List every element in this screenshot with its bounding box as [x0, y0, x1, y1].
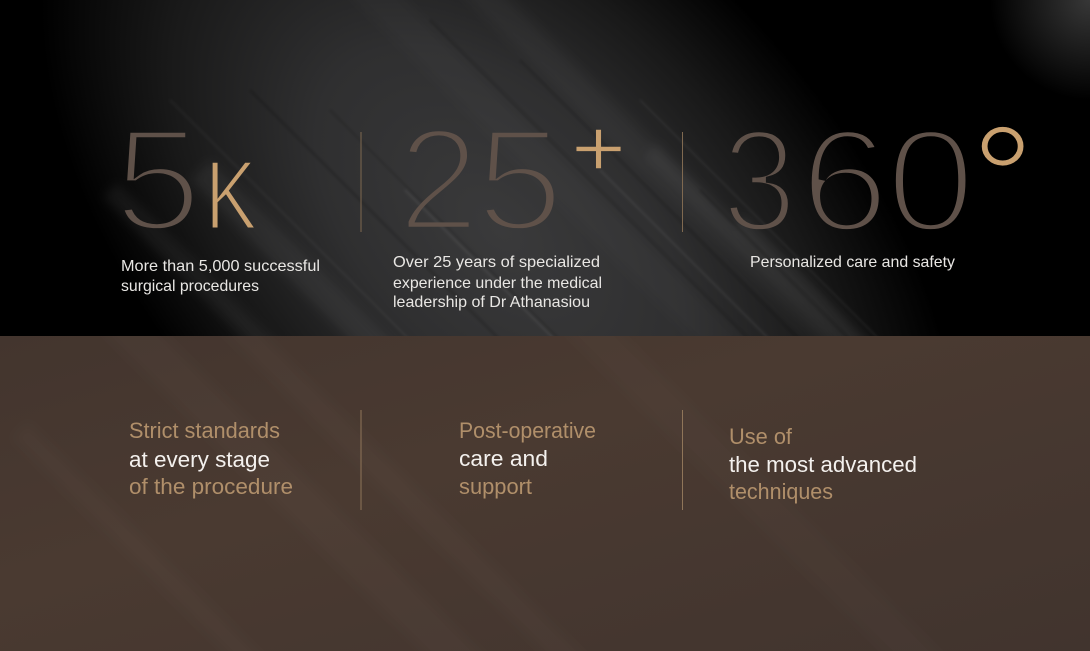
divider — [360, 410, 362, 510]
text: advanced techniques: Use of — [729, 424, 793, 449]
text: 25+ caption: Over 25 years of specialized — [393, 254, 600, 271]
symbol: degree: ° — [971, 96, 1034, 261]
big number: 5K — [124, 132, 254, 228]
text: 25+ caption — [393, 254, 602, 311]
text: strict standards — [129, 418, 293, 499]
text: strict standards: Strict standards — [129, 418, 280, 443]
text: 25+ caption: leadership of Dr Athanasiou — [393, 294, 590, 311]
text: post-operative care: Post-operative — [459, 418, 596, 443]
text: 5K caption: surgical procedures — [121, 278, 259, 295]
symbol: plus: + — [571, 102, 626, 194]
divider — [360, 132, 362, 232]
digits: 360 — [730, 132, 966, 230]
text: 25+ caption: experience under the medical — [393, 275, 602, 292]
text: 5K caption: More than 5,000 successful — [121, 258, 320, 275]
digits: 25: 2 — [398, 98, 479, 261]
divider — [682, 132, 683, 232]
text: post-operative care: care and — [459, 446, 548, 471]
big number: 360 degrees — [730, 126, 1024, 230]
digits: 25 — [408, 131, 554, 228]
digits: 360: 3 — [722, 99, 797, 262]
big number: 25+ — [408, 130, 621, 228]
divider — [682, 410, 683, 510]
panel: brown bottom band — [0, 336, 1090, 651]
text: strict standards: of the procedure — [129, 474, 293, 499]
panel: dark top band — [82, 0, 1090, 336]
digits: 360: 6 — [800, 99, 889, 262]
text: advanced techniques — [729, 424, 917, 504]
text: post-operative care: support — [459, 474, 532, 499]
digits: 25: 5 — [476, 98, 564, 262]
text: advanced techniques: the most advanced — [729, 452, 917, 477]
digits: 360: 0 — [886, 99, 975, 262]
text: post-operative care — [459, 418, 596, 499]
text: advanced techniques: techniques — [729, 479, 833, 504]
text: strict standards: at every stage — [129, 447, 270, 472]
text: 5K caption — [121, 258, 320, 295]
unit: K: K — [205, 141, 257, 250]
digit: 5: 5 — [114, 98, 202, 262]
text: 360 caption: Personalized care and safety — [750, 254, 955, 271]
